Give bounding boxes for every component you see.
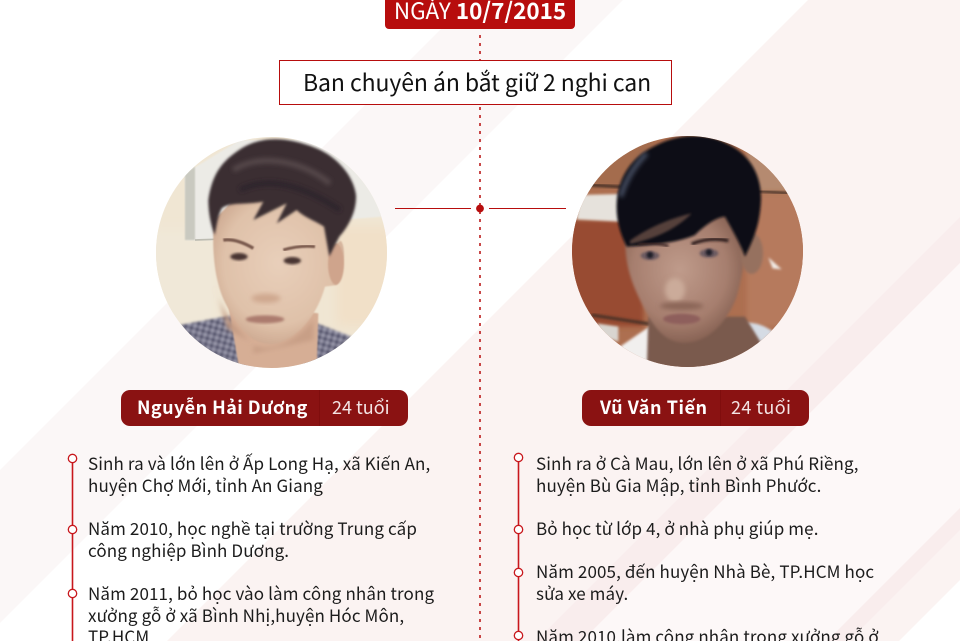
right text: 2005: Năm 2005, đến huyện Nhà Bè, TP.HCM học	[536, 558, 874, 583]
name pill: Vũ Văn Tiến: Vũ Văn Tiến	[600, 394, 708, 420]
left text: 2011	[88, 580, 434, 641]
portrait: Nguyễn Hải Dương	[156, 137, 387, 368]
name pill: Vũ Văn Tiến	[582, 390, 809, 426]
right text: school: Bỏ học từ lớp 4, ở nhà phụ giúp mẹ.	[536, 515, 819, 540]
left text: 2010: Năm 2010, học nghề tại trường Trung cấp	[88, 515, 417, 540]
portrait: Vũ Văn Tiến	[572, 136, 803, 367]
left text: 2011: Năm 2011, bỏ học vào làm công nhân trong	[88, 580, 434, 605]
left text: birthplace	[88, 450, 430, 496]
heading box: Ban chuyên án bắt giữ 2 nghi can	[303, 64, 651, 98]
left text: birthplace: Sinh ra và lớn lên ở Ấp Long Hạ, xã Kiến An,	[88, 450, 430, 475]
left text: birthplace: huyện Chợ Mới, tỉnh An Giang	[88, 472, 323, 496]
name pill: Nguyễn Hải Dương: Nguyễn Hải Dương	[137, 394, 308, 420]
right text: birthplace: Sinh ra ở Cà Mau, lớn lên ở xã Phú Riềng,	[536, 450, 859, 475]
left text: 2010	[88, 515, 417, 562]
left text: 2010: công nghiệp Bình Dương.	[88, 536, 289, 562]
name pill: Vũ Văn Tiến: 24 tuổi	[731, 394, 791, 420]
right text: birthplace	[536, 450, 859, 496]
right text: 2005: sửa xe máy.	[536, 580, 628, 604]
heading box	[279, 60, 672, 105]
left text: 2011: xưởng gỗ ở xã Bình Nhị,huyện Hóc Môn,	[88, 602, 404, 626]
right text: birthplace: huyện Bù Gia Mập, tỉnh Bình Phước.	[536, 472, 821, 496]
name pill: Nguyễn Hải Dương: 24 tuổi	[332, 394, 390, 420]
right text: 2005	[536, 558, 874, 604]
name pill: Nguyễn Hải Dương	[121, 390, 408, 426]
